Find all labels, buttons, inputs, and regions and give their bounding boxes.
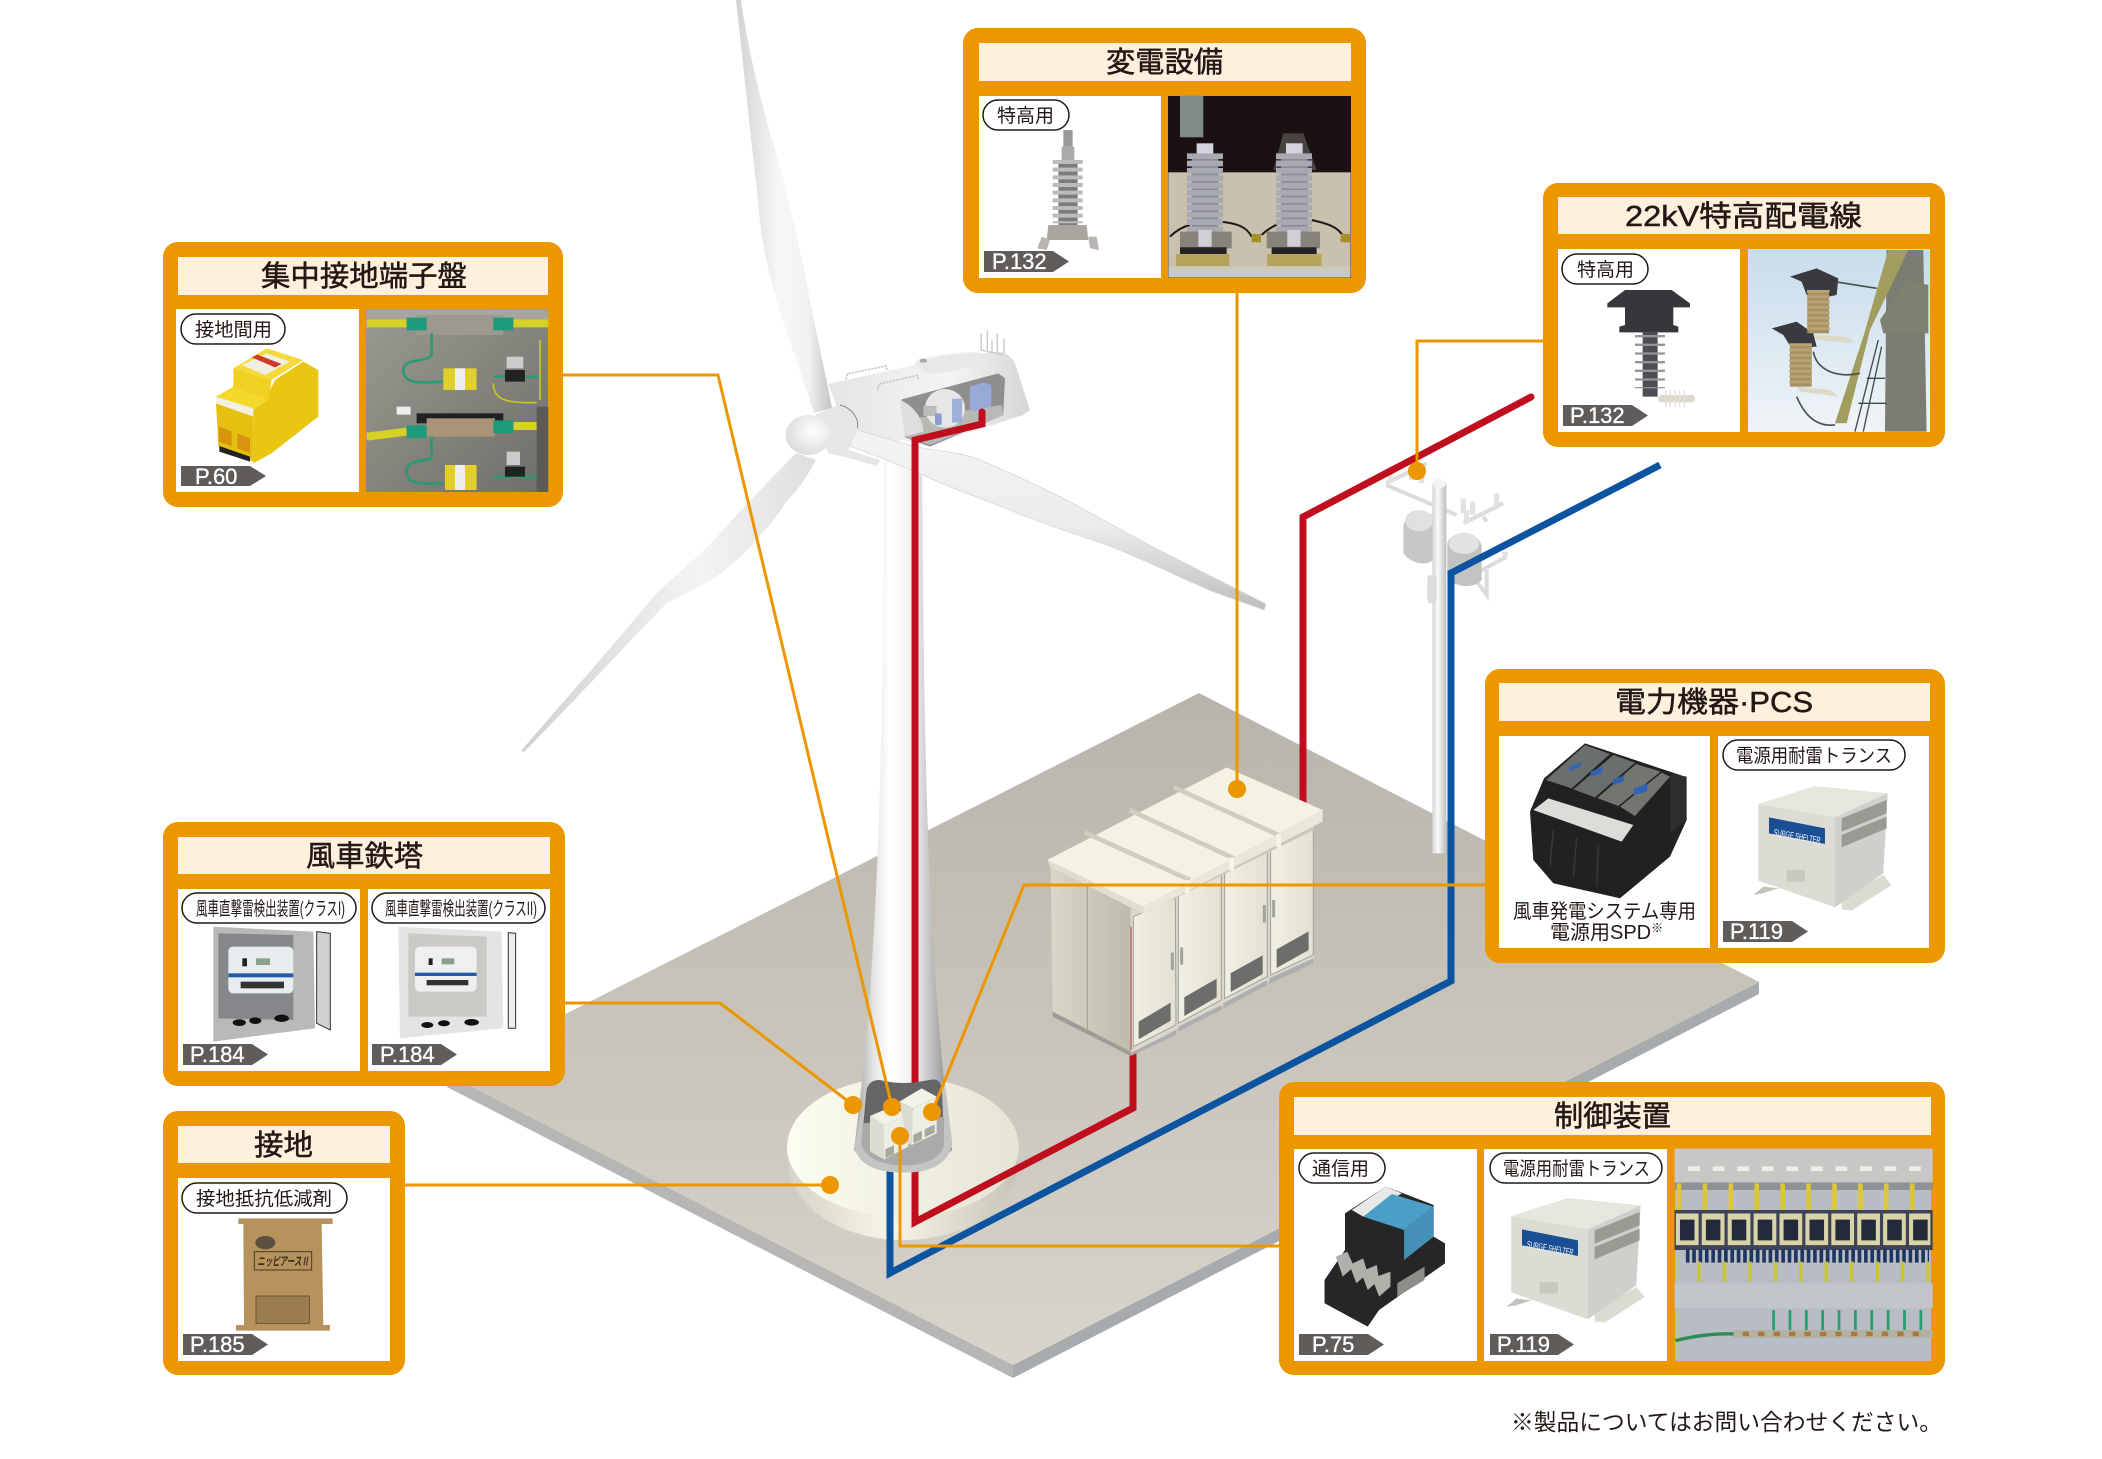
connector lines and target dots bbox=[405, 293, 1543, 1246]
label: 通信用 bbox=[1299, 1153, 1385, 1183]
label: 特高用 bbox=[983, 100, 1069, 130]
photo: grounding board bbox=[366, 309, 548, 492]
red high-voltage cable bbox=[915, 397, 1531, 1222]
panel: 電力機器・PCS bbox=[1485, 669, 1945, 963]
panel: 風車鉄塔 bbox=[163, 822, 565, 1086]
page tag: P.184: P.184 bbox=[380, 1042, 435, 1067]
utility pole bbox=[1386, 463, 1507, 853]
product: substation arrester bbox=[1037, 130, 1099, 250]
rotor hub bbox=[786, 404, 880, 466]
heading: 22kV特高配電線: 22kV特高配電線 bbox=[1625, 200, 1862, 233]
turbine blade: right bbox=[837, 424, 1266, 610]
label: 接地間用 bbox=[181, 314, 285, 344]
product: yellow arrester bbox=[216, 348, 318, 463]
label: 特高用: 特高用 bbox=[1577, 259, 1634, 281]
page tag: P.60: P.60 bbox=[195, 464, 237, 489]
heading: 制御装置: 制御装置 bbox=[1554, 1100, 1671, 1133]
page tag: P.132: P.132 bbox=[1570, 403, 1625, 428]
product: lightning detector class II bbox=[398, 927, 516, 1038]
page tag: P.119 bbox=[1723, 919, 1808, 944]
caption: 風車発電システム専用 電源用SPD bbox=[1513, 900, 1696, 944]
label: 特高用 bbox=[1562, 254, 1648, 284]
panel: 変電設備 bbox=[963, 28, 1366, 293]
product: pole-top arrester bbox=[1607, 290, 1695, 402]
label: 風車直撃雷検出装置(クラスI): 風車直撃雷検出装置(クラスI) bbox=[196, 898, 345, 920]
page tag: P.119: P.119 bbox=[1730, 919, 1783, 944]
product: lightning detector class I bbox=[213, 927, 330, 1042]
turbine blade: upper bbox=[736, 0, 832, 413]
label: 電源用耐雷トランス bbox=[1723, 740, 1905, 770]
caption: 風車発電システム専用 電源用SPD: 風車発電システム専用 bbox=[1513, 900, 1696, 923]
photo: substation arresters bbox=[1168, 96, 1351, 278]
page tag: P.185: P.185 bbox=[190, 1332, 245, 1357]
label: 通信用: 通信用 bbox=[1312, 1158, 1369, 1180]
label: 電源用耐雷トランス: 電源用耐雷トランス bbox=[1503, 1158, 1650, 1180]
page tag: P.75: P.75 bbox=[1312, 1332, 1354, 1357]
product: ground resistance reducer bag: ニッピアースⅡ bbox=[257, 1255, 309, 1269]
page tag: P.119 bbox=[1490, 1332, 1574, 1357]
caption: 風車発電システム専用 電源用SPD: 電源用SPD bbox=[1550, 922, 1651, 944]
ground plate bbox=[447, 693, 1759, 1378]
photo: arresters on pole bbox=[1748, 249, 1930, 432]
product: communication SPD bbox=[1325, 1187, 1445, 1327]
page tag: P.132: P.132 bbox=[992, 249, 1047, 274]
label: 電源用耐雷トランス bbox=[1490, 1153, 1662, 1183]
footnote: ※製品についてはお問い合わせください。 bbox=[1511, 1409, 1942, 1435]
product: surge transformer: SURGE SHELTER bbox=[1526, 1239, 1574, 1258]
turbine blade: lower left bbox=[521, 453, 816, 752]
heading: 集中接地端子盤: 集中接地端子盤 bbox=[261, 260, 467, 293]
product: surge transformer: SURGE SHELTER bbox=[1773, 827, 1821, 846]
nacelle bbox=[828, 331, 1030, 447]
page tag: P.185 bbox=[183, 1332, 268, 1357]
product: surge transformer bbox=[1506, 1198, 1645, 1323]
heading: 変電設備: 変電設備 bbox=[1106, 46, 1223, 79]
product: surge transformer bbox=[1753, 786, 1892, 911]
turbine foundation bbox=[787, 1077, 1019, 1240]
heading: 風車鉄塔: 風車鉄塔 bbox=[306, 840, 423, 873]
wind turbine tower bbox=[854, 460, 952, 1175]
power conditioner cabinets bbox=[1047, 767, 1323, 1056]
heading: 接地: 接地 bbox=[254, 1129, 313, 1162]
label: 電源用耐雷トランス: 電源用耐雷トランス bbox=[1736, 745, 1892, 767]
label: 接地間用: 接地間用 bbox=[195, 319, 272, 341]
label: 特高用: 特高用 bbox=[997, 105, 1054, 127]
caption: 風車発電システム専用 電源用SPD: ※ bbox=[1651, 921, 1663, 935]
product: ground resistance reducer bag bbox=[236, 1218, 333, 1331]
page tag: P.184 bbox=[183, 1042, 268, 1067]
product: wind power SPD bbox=[1530, 743, 1687, 898]
photo: control panel wiring bbox=[1675, 1149, 1933, 1361]
label: 接地抵抗低減剤: 接地抵抗低減剤 bbox=[196, 1188, 332, 1210]
page tag: P.132 bbox=[984, 249, 1069, 274]
page tag: P.184: P.184 bbox=[190, 1042, 245, 1067]
heading: 電力機器·PCS: 電力機器·PCS bbox=[1615, 686, 1813, 719]
label: 風車直撃雷検出装置(クラスII): 風車直撃雷検出装置(クラスII) bbox=[385, 898, 537, 920]
page tag: P.75 bbox=[1299, 1332, 1384, 1357]
panel: 接地 bbox=[163, 1111, 405, 1375]
page tag: P.60 bbox=[181, 464, 266, 489]
page tag: P.132 bbox=[1563, 403, 1648, 428]
tower base opening with cabinets bbox=[854, 1079, 952, 1173]
label: 接地抵抗低減剤 bbox=[182, 1183, 347, 1213]
panel: 集中接地端子盤 bbox=[163, 242, 563, 507]
page tag: P.119: P.119 bbox=[1497, 1332, 1550, 1357]
panel: 22kV特高配電線 bbox=[1543, 183, 1945, 447]
page tag: P.184 bbox=[372, 1042, 457, 1067]
panel: 制御装置 bbox=[1279, 1082, 1945, 1375]
label: 風車直撃雷検出装置(クラスII) bbox=[372, 893, 545, 923]
label: 風車直撃雷検出装置(クラスI) bbox=[182, 893, 356, 923]
blue distribution cable bbox=[890, 465, 1660, 1273]
